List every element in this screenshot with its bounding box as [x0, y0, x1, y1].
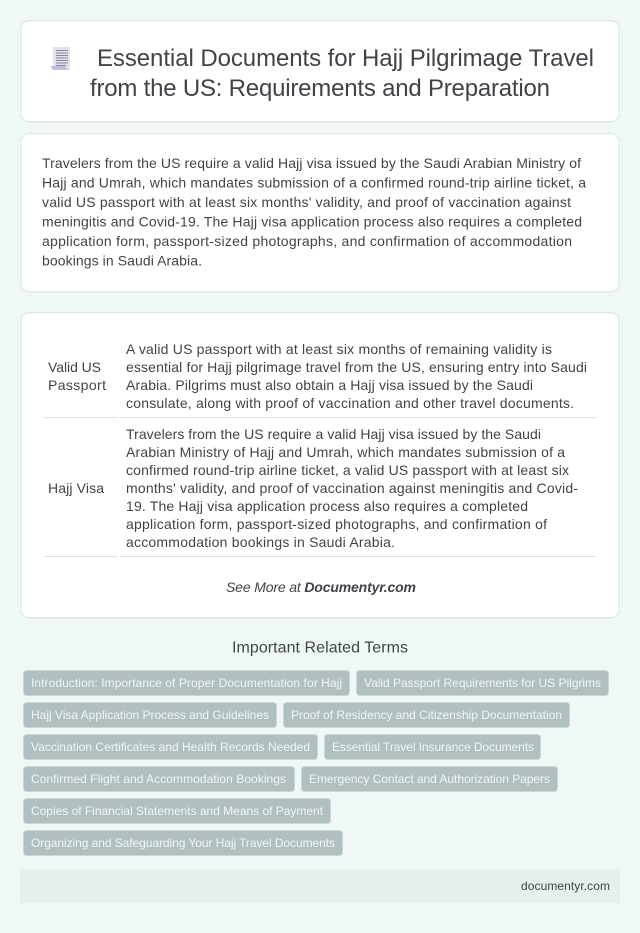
chip: [324, 734, 540, 760]
row: valid US passport: Valid US: [48, 359, 101, 375]
row: valid US passport: Arabia. Pilgrims must also obtain a Hajj visa issued by the Saudi: [126, 377, 533, 393]
chip: Vaccination Certificates and Health Records Needed: [31, 740, 310, 754]
row: valid US passport: [43, 341, 597, 418]
row: valid US passport: essential for Hajj pilgrimage travel from the US, ensuring entry into Saudi: [126, 359, 587, 375]
chip: Essential Travel Insurance Documents: [332, 740, 534, 754]
row: Hajj visa: months' validity, and proof of vaccination against meningitis and Covid-: [126, 480, 578, 496]
chip: [284, 702, 570, 728]
panel: documents table: [21, 313, 619, 618]
row: valid US passport: A valid US passport with at least six months of remaining validity is: [126, 341, 552, 357]
chip: [302, 766, 558, 792]
chip: Proof of Residency and Citizenship Documentation: [291, 708, 562, 722]
chip: [24, 734, 318, 760]
summary text: application form, passport-sized photographs, and confirmation of accommodation: [42, 233, 572, 249]
row: Hajj visa: Travelers from the US require a valid Hajj visa issued by the Saudi: [126, 426, 541, 442]
summary text: Travelers from the US require a valid Hajj visa issued by the Saudi Arabian Ministry of: [42, 155, 581, 171]
chip: Confirmed Flight and Accommodation Bookings: [31, 772, 286, 786]
row: valid US passport: Passport: [48, 377, 106, 393]
chip: [24, 830, 342, 856]
summary text: Hajj and Umrah, which mandates submission of a confirmed round-trip airline ticket, a: [42, 174, 586, 190]
row: Hajj visa: application form, passport-sized photographs, and confirmation of: [126, 516, 547, 532]
chip: Hajj Visa Application Process and Guidelines: [31, 708, 269, 722]
footer: documentyr.com: [521, 879, 610, 893]
chip: [24, 670, 350, 696]
row: valid US passport: consulate, along with proof of vaccination and other travel documents.: [126, 395, 574, 411]
summary text: bookings in Saudi Arabia.: [42, 252, 202, 268]
panel: summary paragraph: [21, 134, 619, 292]
chip: [24, 766, 294, 792]
chip: Organizing and Safeguarding Your Hajj Travel Documents: [31, 836, 335, 850]
chip: [24, 798, 330, 824]
row: Hajj visa: Hajj Visa: [48, 480, 104, 496]
title: from the US: Requirements and Preparation: [90, 75, 550, 102]
chip: [356, 670, 608, 696]
chip: Copies of Financial Statements and Means of Payment: [31, 804, 324, 818]
title: Essential Documents for Hajj Pilgrimage Travel: [97, 45, 594, 72]
row: Hajj visa: accommodation bookings in Saudi Arabia.: [126, 534, 395, 550]
summary text: [42, 155, 586, 268]
title: [90, 45, 594, 102]
see more link: See More at Documentyr.com: [226, 579, 416, 595]
icon: document: [51, 47, 70, 70]
row: Hajj visa: 19. The Hajj visa application process also requires a completed: [126, 498, 528, 514]
summary text: valid US passport with at least six months' validity, and proof of vaccination against: [42, 194, 571, 210]
row: Hajj visa: Arabian Ministry of Hajj and Umrah, which mandates submission of a: [126, 444, 565, 460]
row: Hajj visa: [43, 426, 597, 556]
heading: related terms: Important Related Terms: [232, 640, 408, 656]
panel: header: [21, 21, 619, 122]
footer: [20, 869, 620, 903]
summary text: meningitis and Covid-19. The Hajj visa application process also requires a completed: [42, 214, 582, 230]
chip: Valid Passport Requirements for US Pilgrims: [364, 676, 601, 690]
row: Hajj visa: confirmed round-trip airline ticket, a valid US passport with at least six: [126, 462, 569, 478]
chip: [24, 702, 276, 728]
chip: Introduction: Importance of Proper Documentation for Hajj: [31, 676, 342, 690]
related terms chips: [24, 670, 608, 856]
chip: Emergency Contact and Authorization Papers: [309, 772, 550, 786]
